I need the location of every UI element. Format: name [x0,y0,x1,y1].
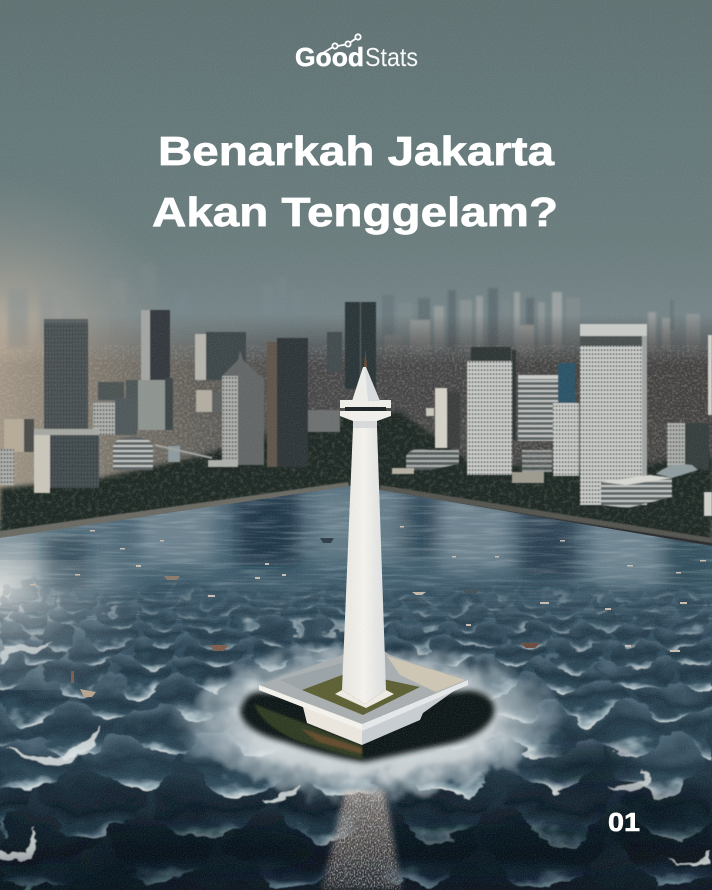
left water glare [0,560,119,690]
distant boats [30,526,706,652]
flame spire [352,349,380,401]
central city towers [208,302,376,467]
logo trend line [323,34,361,53]
bright foam crests [0,640,712,864]
title [152,128,558,235]
far right skyline [330,288,700,361]
left city towers [0,310,246,493]
fine ripples [0,490,712,620]
warm haze glow [0,170,200,490]
water reflections [45,490,712,590]
right city towers [392,324,712,516]
logo: GoodStats [295,34,418,72]
dense city ground [0,315,712,520]
far hazy skyline [8,265,302,348]
page number: 01 [608,807,640,837]
title line 2: Akan Tenggelam? [152,189,558,235]
sun reflection [320,787,405,890]
sky background [0,0,712,400]
monument base [259,640,468,745]
national monument island [240,349,494,762]
boats [71,538,540,697]
logo wordmark: Stats [365,42,418,72]
observation platform [340,400,391,428]
island vegetation [240,690,494,762]
monument shaft [342,427,386,704]
title line 1: Benarkah Jakarta [158,128,555,174]
sea [0,480,712,890]
shoreline trees [0,412,712,545]
dark water masses [0,747,712,890]
scalloped wave rows [0,585,712,890]
foam around island [150,648,585,810]
waterfront promenade [0,482,712,546]
logo wordmark: Good [295,42,364,72]
